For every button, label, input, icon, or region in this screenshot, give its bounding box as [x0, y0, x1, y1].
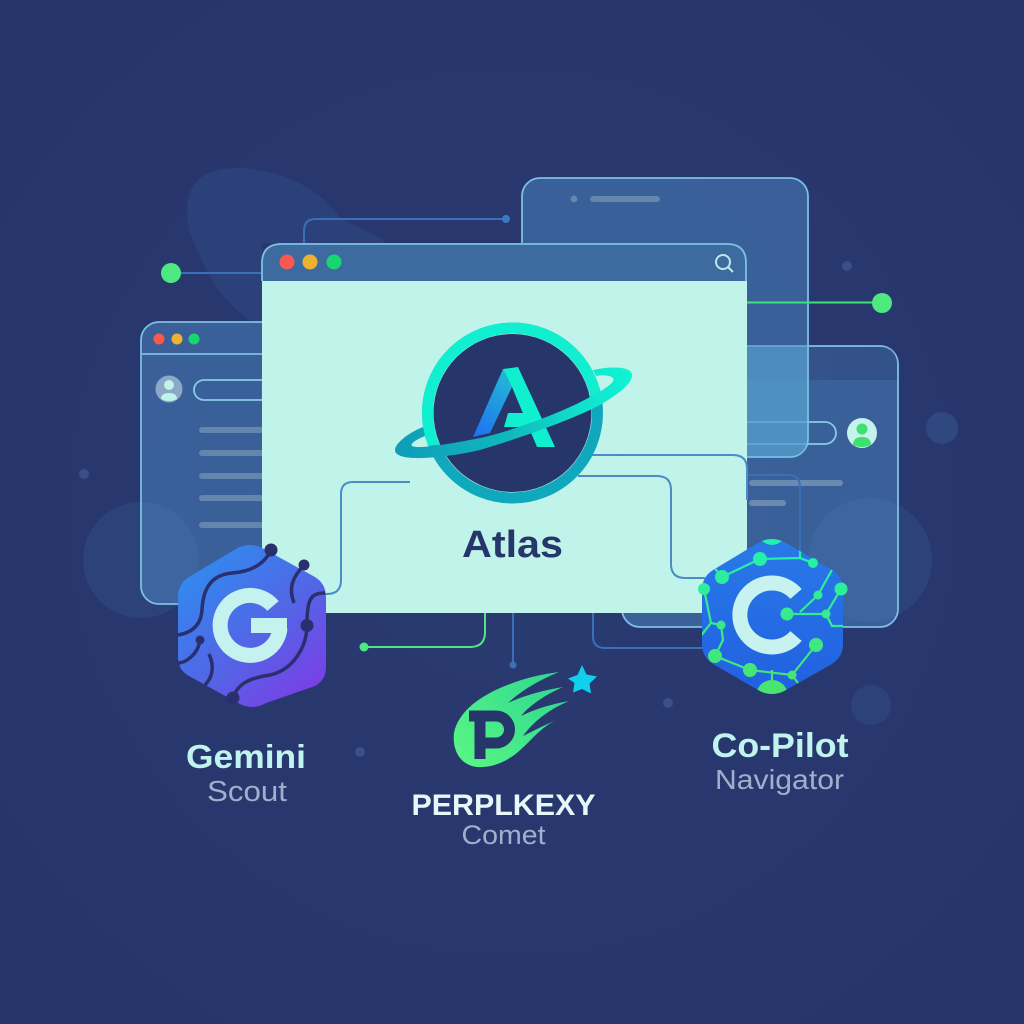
label: Co-Pilot Navigator: Co-Pilot [712, 727, 848, 765]
label: Co-Pilot Navigator [712, 727, 848, 795]
star [568, 665, 597, 694]
avatar: user [156, 376, 182, 402]
connector: left green dot [161, 263, 264, 283]
background blob [187, 168, 385, 325]
heading: Atlas: Atlas [462, 524, 563, 566]
connector: top line with dot [304, 215, 510, 245]
avatar: green user [847, 418, 877, 448]
network lines and nodes [702, 539, 843, 694]
ghost window outlines over main window [262, 323, 747, 613]
window controls [154, 334, 200, 344]
connectors below main window [360, 600, 705, 668]
letter A [473, 367, 555, 447]
label: Co-Pilot Navigator: Navigator [715, 764, 844, 795]
label: Gemini Scout: Gemini [186, 738, 306, 775]
circuit lines [178, 550, 325, 698]
search pill [680, 422, 836, 444]
circuit nodes [196, 544, 314, 704]
connector: right green dot [745, 293, 892, 313]
icon: search [716, 255, 733, 272]
panel: top right back window [522, 178, 808, 457]
icon: Gemini hexagon [178, 544, 326, 707]
letter P [469, 716, 510, 759]
label: PERPLKEXY Comet: Comet [462, 820, 546, 850]
panel: right back window [622, 346, 898, 627]
orbit ring [395, 367, 632, 458]
letter G [220, 595, 287, 655]
panel: main browser window [262, 243, 747, 613]
text lines [749, 480, 843, 506]
text lines [199, 427, 279, 528]
panel: left back window [141, 322, 403, 604]
label: Gemini Scout: Scout [207, 776, 287, 808]
icon: Perplexity comet [454, 665, 597, 767]
label: PERPLKEXY Comet: PERPLKEXY [412, 789, 596, 822]
letter C [740, 583, 796, 647]
icon: Co-Pilot hexagon [698, 539, 848, 694]
search pill [194, 380, 344, 400]
label: PERPLKEXY Comet [412, 789, 596, 850]
connectors over main window [320, 455, 800, 594]
label: Gemini Scout [186, 738, 306, 808]
window controls [280, 254, 342, 270]
icon: Atlas planet logo [395, 328, 632, 498]
decorative background circles [79, 261, 958, 757]
